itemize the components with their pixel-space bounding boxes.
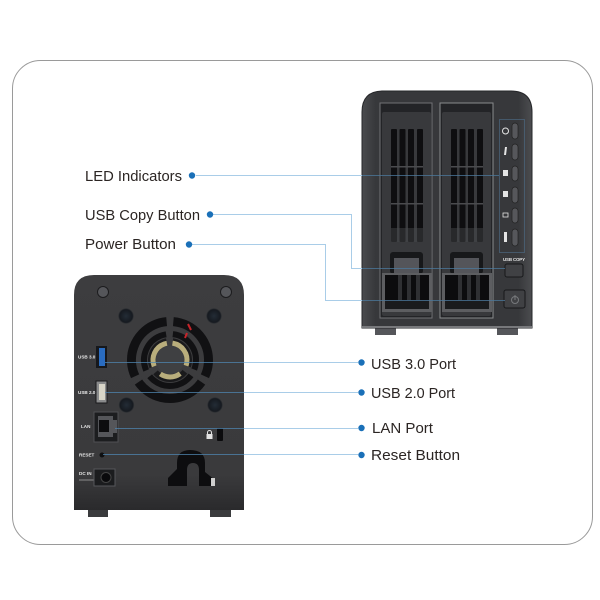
label: USB 2.0 Port: USB 2.0 Port — [371, 386, 455, 402]
line: USB 3.0 port — [105, 362, 358, 364]
line: reset button — [103, 454, 358, 456]
DC in jack — [79, 469, 115, 486]
USB 2.0 port: USB 2.0 — [78, 390, 96, 395]
callout dots — [186, 172, 365, 458]
screws — [98, 286, 232, 298]
label: Reset Button: Reset Button — [371, 448, 460, 464]
label: Power Button: Power Button — [85, 237, 176, 253]
USB 3.0 port: USB 3.0 — [78, 354, 96, 360]
rear body — [74, 275, 244, 510]
device: rear view NAS — [74, 275, 244, 517]
DC in jack: DC IN — [79, 471, 92, 476]
line: LAN port — [115, 428, 358, 430]
front body — [362, 91, 532, 328]
reset button: RESET — [79, 452, 95, 458]
lock icon and slot — [206, 428, 223, 441]
label: LAN Port: LAN Port — [372, 421, 433, 437]
label: USB Copy Button: USB Copy Button — [85, 208, 200, 224]
reset button — [79, 452, 104, 458]
panel: rounded background card — [12, 60, 592, 544]
device: front view NAS — [362, 91, 532, 335]
power button — [504, 290, 525, 308]
rubber mounts — [118, 308, 223, 413]
line: USB 2.0 port — [105, 392, 358, 394]
LAN port: LAN — [81, 424, 91, 429]
line: USB copy button — [210, 214, 505, 268]
line: LED indicators — [196, 174, 499, 176]
drive bay left — [380, 103, 432, 318]
USB 3.0 port — [78, 346, 107, 368]
cable hook cutout — [168, 450, 215, 486]
USB copy label and button: USB COPY — [503, 257, 525, 262]
drive bay right — [440, 103, 493, 318]
USB 2.0 port — [78, 381, 107, 403]
line: power button — [189, 244, 505, 300]
fan grille — [116, 306, 224, 414]
label: LED Indicators: LED Indicators — [85, 169, 182, 185]
rear feet — [88, 509, 231, 517]
leader lines — [103, 176, 505, 454]
label: USB 3.0 Port: USB 3.0 Port — [371, 357, 456, 373]
front feet — [375, 326, 518, 335]
LED indicator strip — [500, 120, 524, 252]
LAN port — [81, 412, 118, 442]
USB copy label and button — [503, 257, 525, 277]
